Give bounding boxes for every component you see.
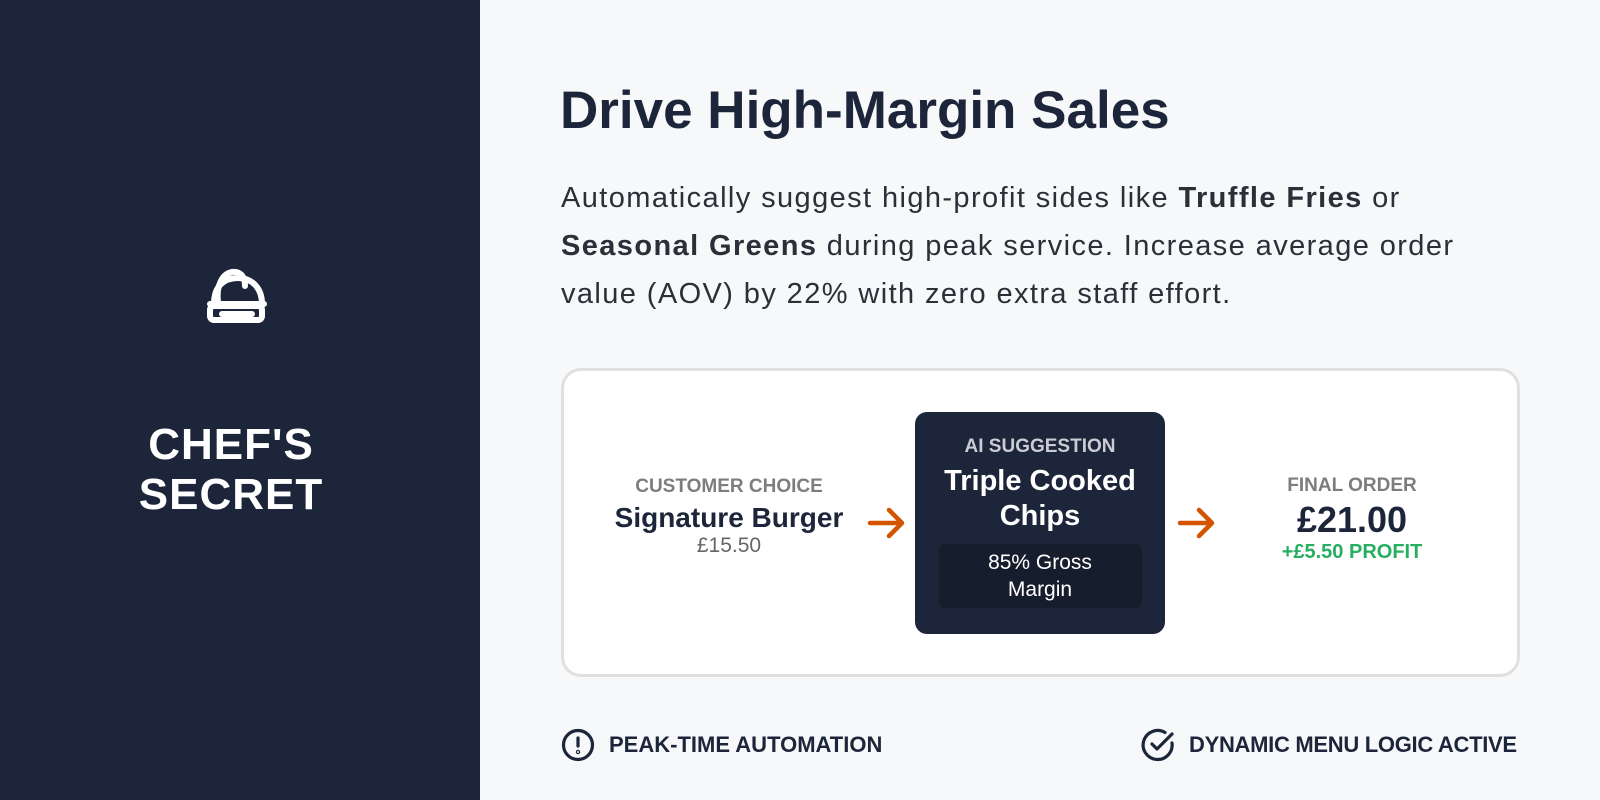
final order xyxy=(1282,475,1422,563)
AI suggestion box: Triple Cooked xyxy=(944,465,1136,497)
customer choice: Signature Burger xyxy=(615,502,843,533)
description paragraph: Seasonal Greens during peak service. Increase average order xyxy=(561,230,1454,262)
final order: FINAL ORDER xyxy=(1287,475,1417,496)
final order: £21.00 xyxy=(1297,499,1407,540)
customer choice xyxy=(615,476,843,557)
AI suggestion box xyxy=(915,412,1165,634)
AI suggestion box: AI SUGGESTION xyxy=(965,436,1115,457)
footer: dynamic menu logic: DYNAMIC MENU LOGIC ACTIVE xyxy=(1189,732,1517,757)
margin badge: Margin xyxy=(1008,578,1072,601)
margin badge: 85% Gross xyxy=(988,551,1092,574)
title: Drive High-Margin Sales xyxy=(560,81,1170,140)
icon: check xyxy=(1141,728,1174,762)
description paragraph: Automatically suggest high-profit sides like Truffle Fries or xyxy=(561,182,1401,214)
footer: peak-time automation: PEAK-TIME AUTOMATION xyxy=(609,732,882,757)
arrow 2 xyxy=(1178,508,1214,538)
sidebar title: SECRET xyxy=(139,470,323,519)
description paragraph: value (AOV) by 22% with zero extra staff effort. xyxy=(561,278,1232,310)
footer: dynamic menu logic xyxy=(1141,728,1517,762)
arrow 1 xyxy=(868,508,904,538)
icon: chef bell xyxy=(207,268,267,323)
final order: +£5.50 PROFIT xyxy=(1282,541,1422,563)
card: order flow xyxy=(561,368,1520,677)
footer: peak-time automation xyxy=(562,728,882,762)
AI suggestion box: Chips xyxy=(1000,500,1080,532)
description paragraph xyxy=(561,182,1454,310)
icon: alert xyxy=(562,728,594,762)
sidebar panel xyxy=(0,0,480,800)
sidebar title: CHEF'S xyxy=(148,420,314,469)
customer choice: CUSTOMER CHOICE xyxy=(635,476,823,497)
customer choice: £15.50 xyxy=(697,534,761,557)
sidebar title xyxy=(139,420,323,519)
margin badge xyxy=(938,544,1142,608)
